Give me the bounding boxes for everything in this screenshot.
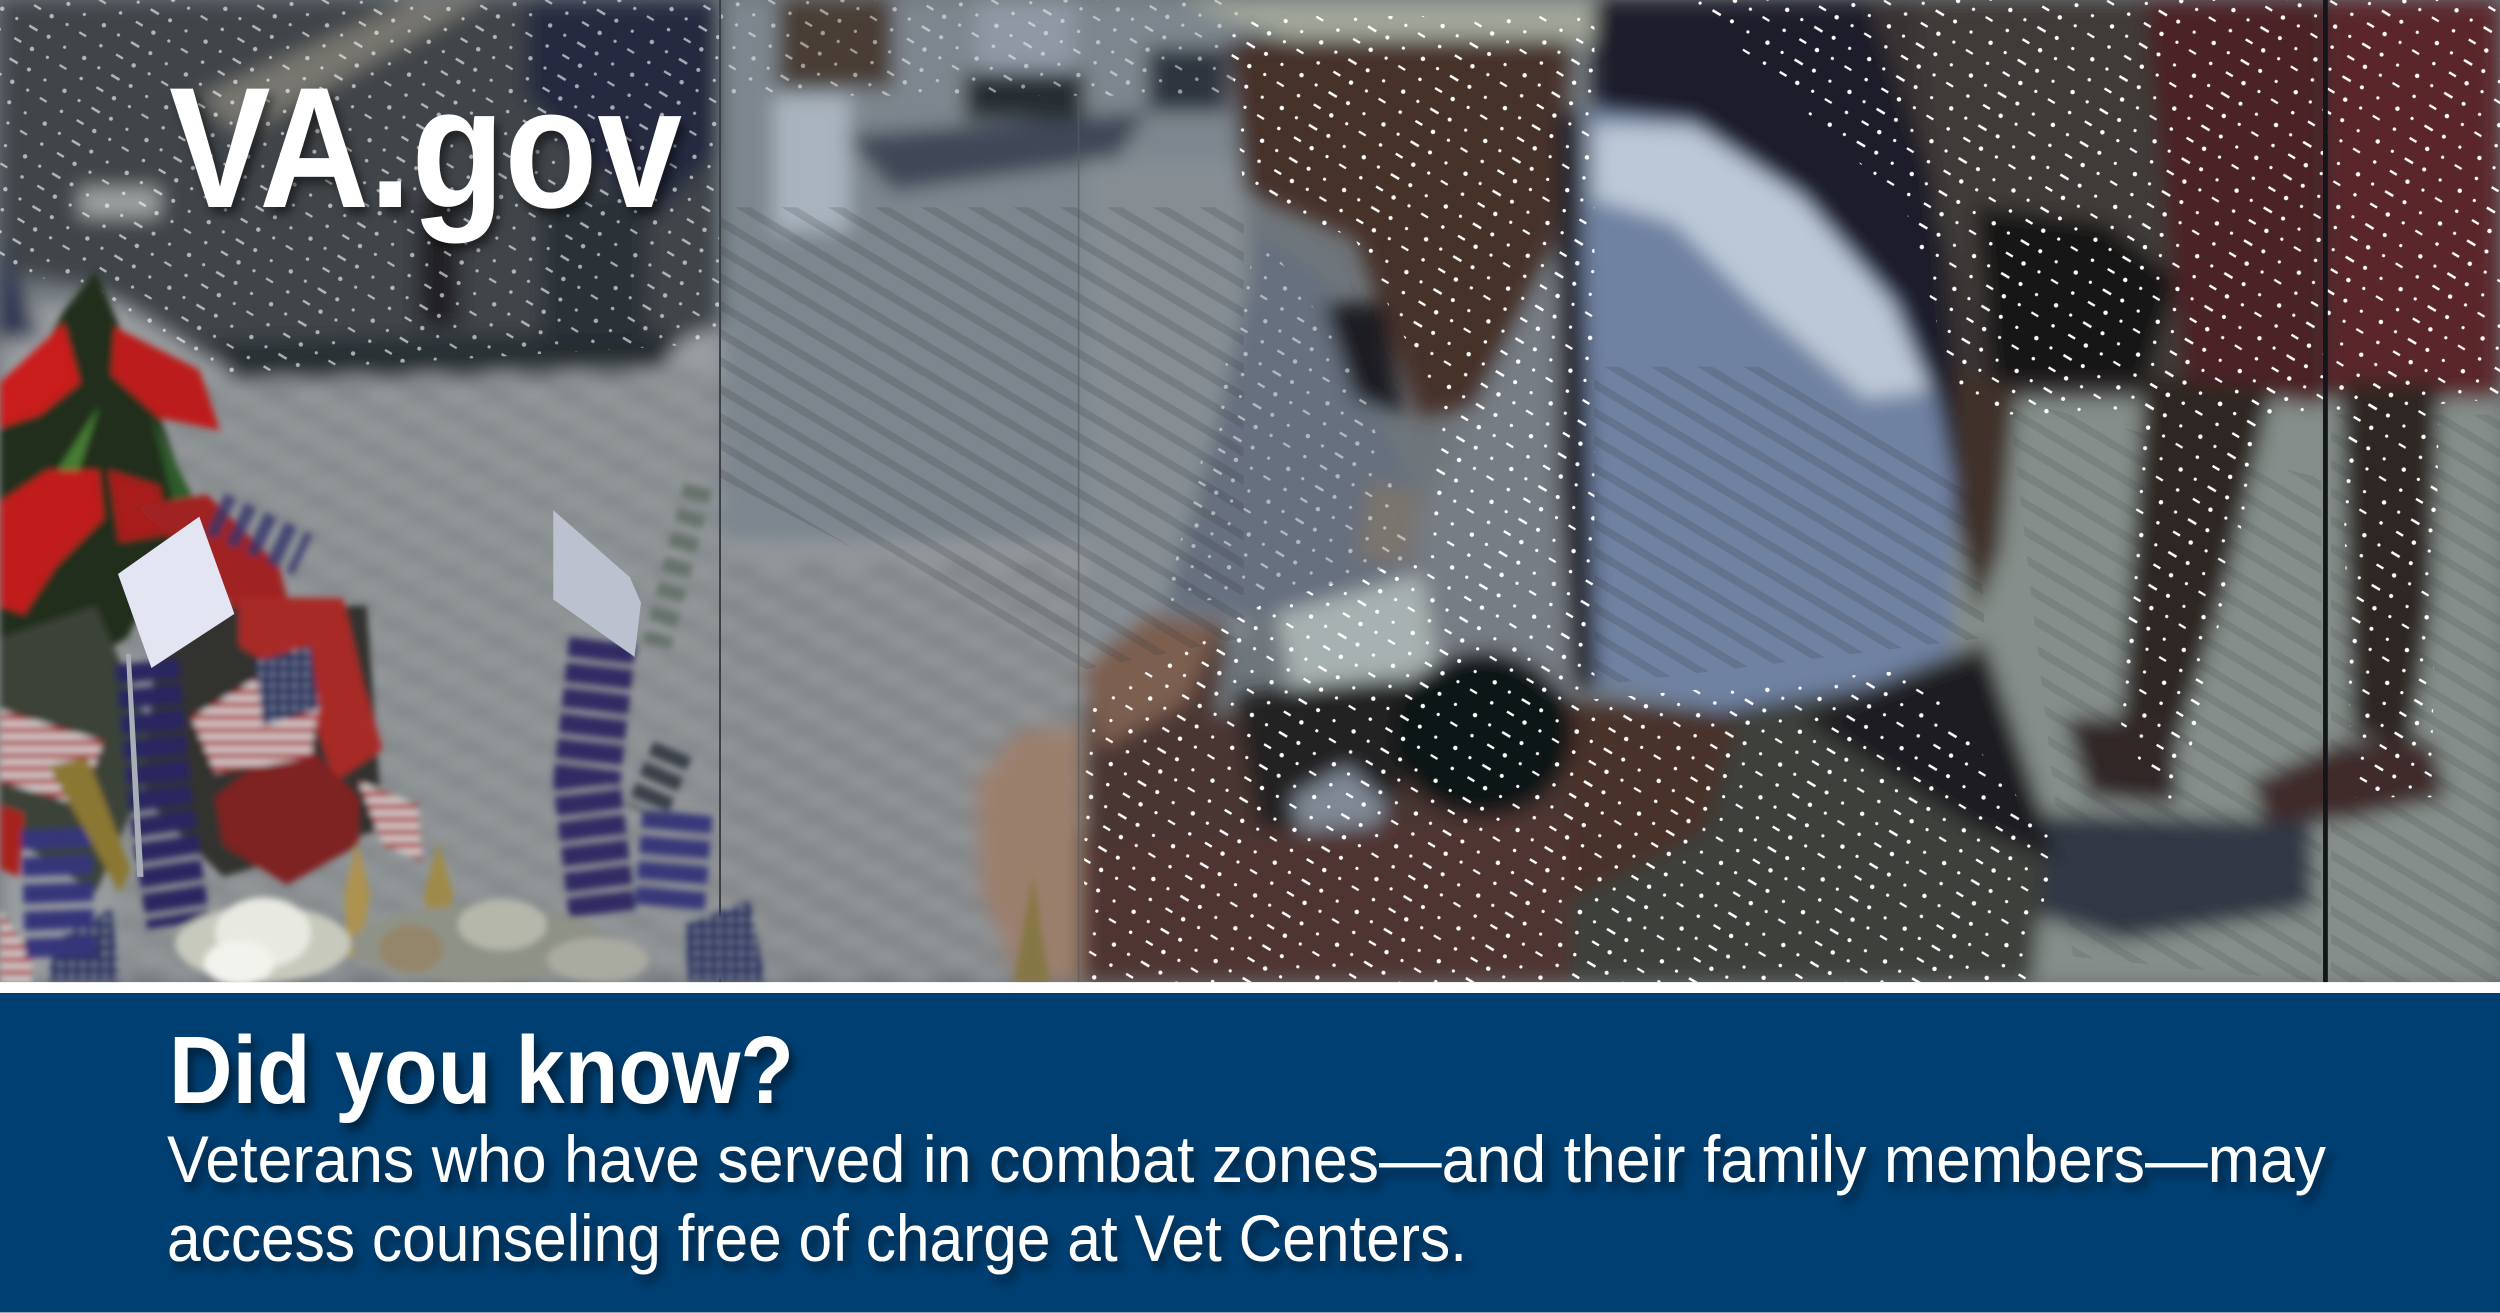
- panel: blue information band: [0, 993, 2500, 1313]
- icon: white note card on wreath: [118, 517, 234, 877]
- left sleeve: [1164, 252, 1394, 623]
- icon: note card on flowers: [553, 510, 641, 657]
- centre panel: [706, 0, 1252, 546]
- bud stems: [48, 757, 131, 893]
- inscription dots: [0, 0, 2500, 982]
- torso reddish: [1228, 40, 1570, 418]
- centre shirt: [1416, 239, 1591, 689]
- right side: [1953, 399, 2328, 982]
- body text: [167, 1122, 2326, 1275]
- body text: access counseling free of charge at Vet Centers.: [167, 1201, 1467, 1275]
- upper right base: [1594, 0, 2328, 415]
- back of shirt: [1578, 108, 1985, 711]
- light gap: [1276, 574, 1475, 694]
- fine inscription texture: [721, 207, 2500, 982]
- photo: reflections in the Vietnam Veterans Memorial wall: [0, 0, 2500, 985]
- red poinsettias: [0, 324, 80, 427]
- blurred reflection shapes: [0, 0, 2500, 982]
- delphiniums: [147, 662, 179, 925]
- hat: [1180, 0, 1614, 64]
- flags: [191, 670, 319, 773]
- white lilies: [175, 906, 351, 982]
- pants lower: [1570, 641, 2049, 982]
- body text: Veterans who have served in combat zones—and their family members—may: [167, 1122, 2326, 1196]
- arm and hands: [1020, 614, 1570, 982]
- heading: Did you know?: Did you know?: [169, 1017, 794, 1124]
- wall panel seams: [719, 0, 2328, 982]
- title: VA.gov: VA.gov: [169, 52, 682, 244]
- flowers and wreath: [0, 271, 1049, 985]
- greenery: [0, 270, 176, 649]
- pavement: [0, 303, 1100, 982]
- upper left dark reflection: [0, 0, 721, 359]
